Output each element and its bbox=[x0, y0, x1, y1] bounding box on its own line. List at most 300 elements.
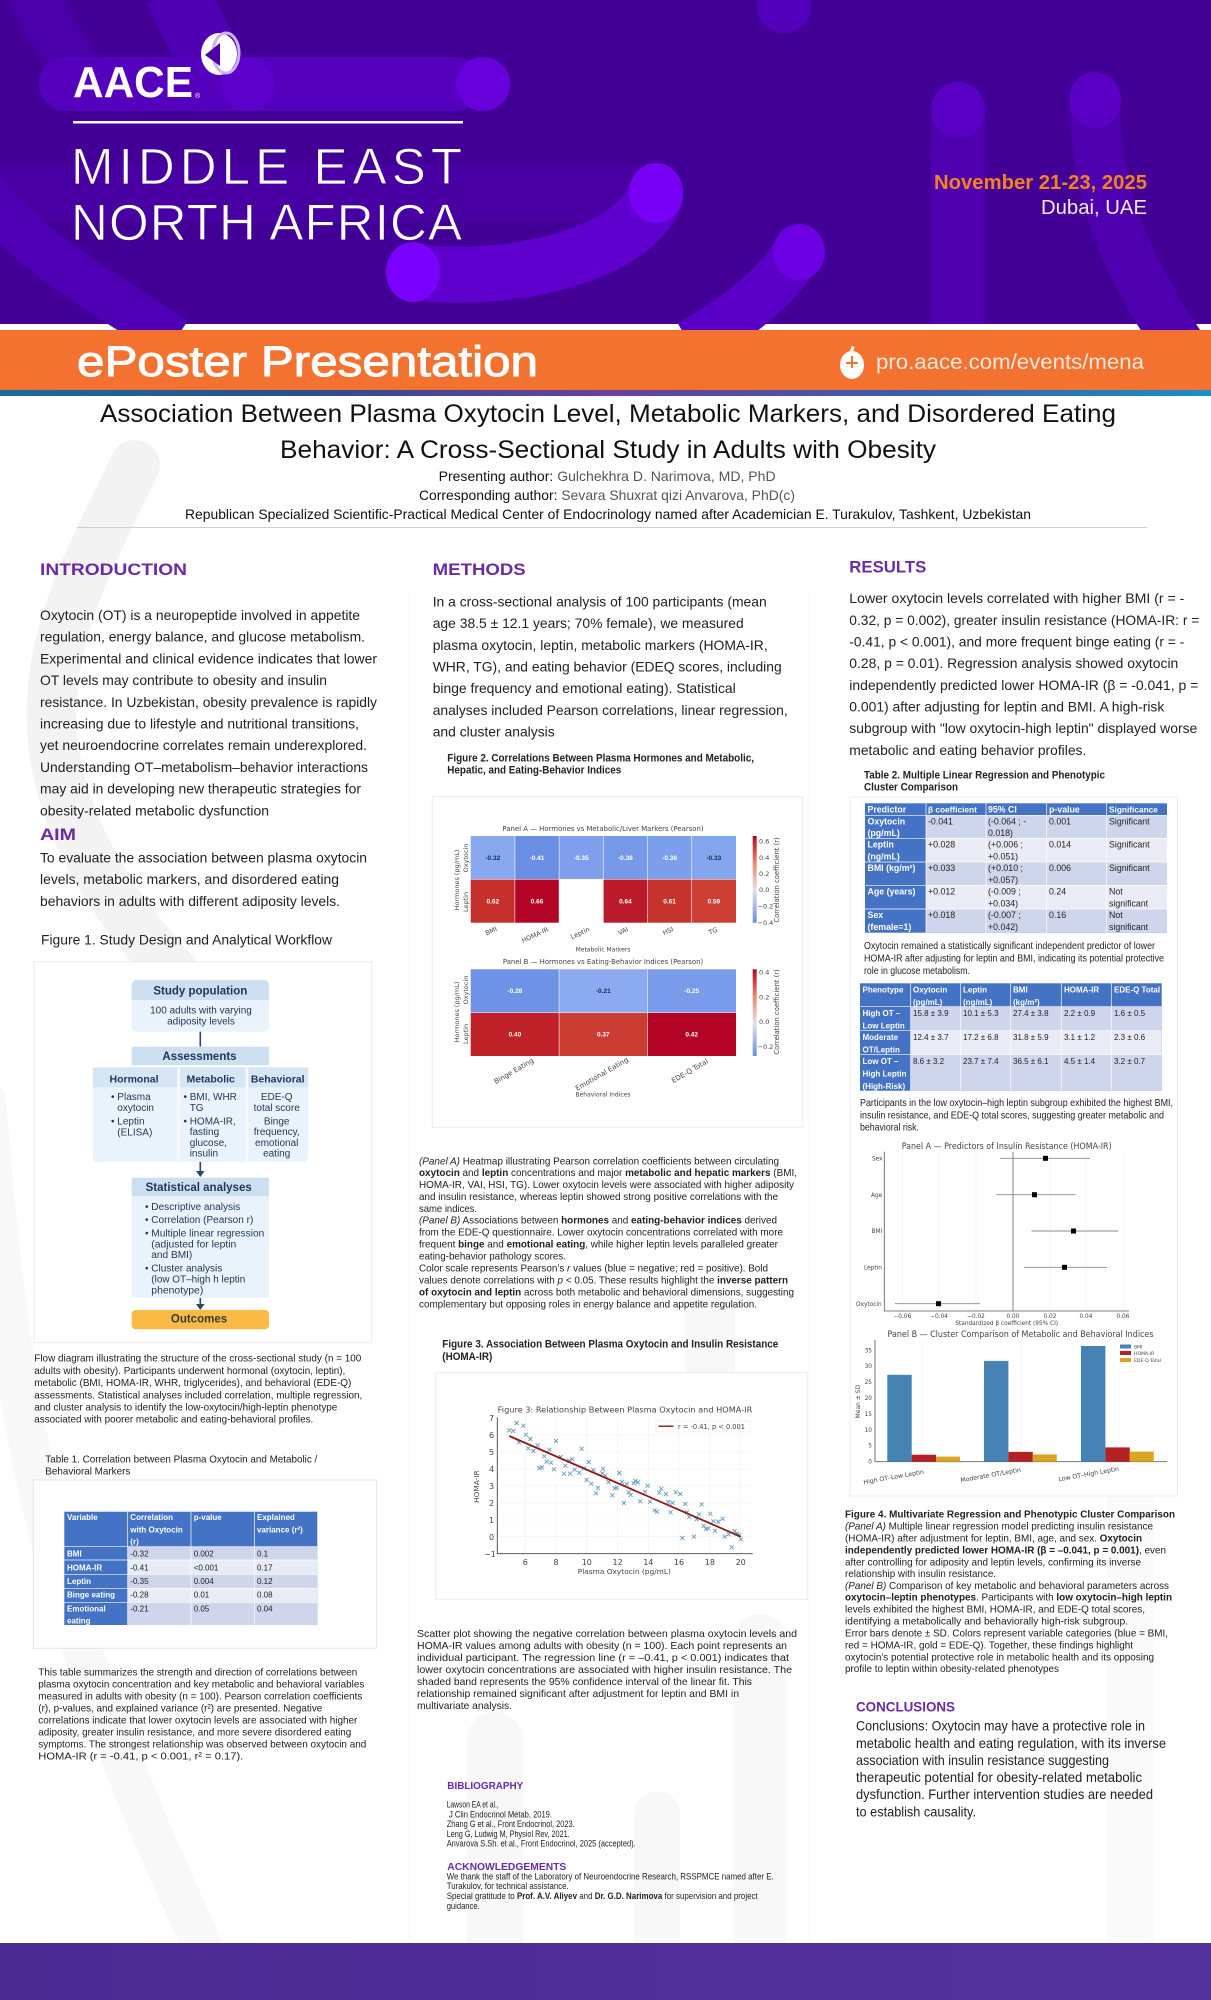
box: assessments: • bbox=[184, 1116, 188, 1127]
table 1 caption: symptoms. The strongest relationship was observed between oxytocin and bbox=[38, 1739, 367, 1750]
figure 3 heading: (HOMA-IR) bbox=[442, 1351, 493, 1363]
tick labels: 6 bbox=[489, 1431, 494, 1440]
box: assessments: Plasma bbox=[117, 1092, 151, 1103]
table: regression: -0.041 bbox=[928, 816, 953, 826]
heatmap: panel A bbox=[453, 825, 781, 954]
box: assessments: BMI, WHR bbox=[190, 1092, 237, 1103]
panel: figure 1 flow diagram bbox=[34, 962, 372, 1343]
heatmap: panel A: TG bbox=[706, 926, 719, 937]
tick labels: −1 bbox=[484, 1550, 496, 1559]
panel: figure 3 scatter plot: HOMA-IR bbox=[472, 1470, 481, 1503]
figure 3 caption: relationship remained significant after adjustment for leptin and BMI in bbox=[417, 1689, 739, 1700]
legend: EDE-Q Total bbox=[1134, 1358, 1161, 1364]
heatmap: panel A: Metabolic Markers bbox=[576, 946, 630, 954]
text: aim bbox=[40, 850, 367, 909]
legend bbox=[1118, 1343, 1165, 1367]
table: correlations: 0.05 bbox=[194, 1604, 210, 1613]
table: phenotypes bbox=[860, 983, 1162, 1091]
table: correlations: (r) bbox=[130, 1537, 139, 1546]
ePoster band: pro.aace.com/events/mena bbox=[876, 351, 1144, 374]
chart: bar chart panel B: 15 bbox=[865, 1412, 872, 1418]
heatmap: panel A: -0.38 bbox=[618, 855, 633, 862]
chart: bar chart panel B: 25 bbox=[865, 1380, 872, 1386]
authors and affiliation: Republican Specialized Scientific-Practical Medical Center of Endocrinology named after Academician E. Turakulov, Tashkent, Uzbekistan bbox=[185, 506, 1031, 522]
text: results: independently predicted lower HOMA-IR (β = -0.041, p = bbox=[849, 677, 1198, 693]
heatmap: panel B: Oxytocin bbox=[462, 976, 470, 1004]
panel: table 2 and figure 4 bbox=[850, 797, 1178, 1496]
text: introduction: regulation, energy balance, and glucose metabolism. bbox=[40, 629, 365, 645]
box: assessments: HOMA-IR, bbox=[190, 1116, 236, 1127]
box: assessments: Binge bbox=[264, 1116, 290, 1127]
date and place: November 21-23, 2025 bbox=[934, 172, 1147, 194]
figure 2 caption: and insulin resistance, whereas leptin showed strong positive correlations with the bbox=[419, 1192, 778, 1203]
colour scale B: 0.0 bbox=[759, 1018, 769, 1026]
heatmap: panel B: Emotional Eating bbox=[574, 1056, 630, 1093]
table: correlations: 0.002 bbox=[194, 1550, 214, 1559]
table: regression: 0.24 bbox=[1049, 886, 1066, 896]
box: assessments bbox=[93, 1047, 308, 1162]
heatmap: panel A: -0.36 bbox=[662, 855, 677, 862]
tick labels: 4 bbox=[489, 1465, 494, 1474]
box: assessments: Hormonal bbox=[109, 1073, 159, 1085]
table: correlations: Variable bbox=[67, 1513, 98, 1522]
table: correlations: with Oxytocin bbox=[129, 1525, 183, 1534]
box: statistical analyses: (low OT–high h leptin bbox=[151, 1274, 245, 1285]
phenotype note: Participants in the low oxytocin–high leptin subgroup exhibited the highest BMI, bbox=[860, 1098, 1173, 1109]
text: acknowledgements: Turakulov, for technical assistance. bbox=[447, 1881, 569, 1891]
title bbox=[100, 400, 1116, 464]
table 2 note: role in glucose metabolism. bbox=[864, 966, 970, 977]
table: phenotypes: Phenotype bbox=[862, 986, 904, 995]
heatmap: panel A: -0.35 bbox=[574, 855, 589, 862]
text: results: Lower oxytocin levels correlated with higher BMI (r = - bbox=[849, 590, 1185, 606]
text: acknowledgements bbox=[447, 1871, 774, 1911]
table: regression: +0.028 bbox=[928, 840, 955, 850]
table: phenotypes: HOMA-IR bbox=[1064, 986, 1099, 995]
box: assessments: • bbox=[111, 1092, 115, 1103]
text: acknowledgements: We thank the staff of the Laboratory of Neuroendocrine Research, RSSPMCE named after E. bbox=[447, 1871, 774, 1881]
text: bibliography bbox=[447, 1800, 636, 1849]
footer band bbox=[0, 1943, 1211, 2000]
text: conclusions: metabolic health and eating regulation, with its inverse bbox=[856, 1735, 1166, 1751]
text: acknowledgements: guidance. bbox=[447, 1901, 480, 1911]
chart: forest plot panel A: Panel A — Predictors of Insulin Resistance (HOMA-IR) bbox=[902, 1141, 1112, 1151]
heading: introduction: INTRODUCTION bbox=[40, 560, 187, 579]
colour scale B: 0.4 bbox=[759, 968, 769, 976]
table: phenotypes: 2.2 ± 0.9 bbox=[1064, 1009, 1096, 1018]
table: correlations: 0.04 bbox=[257, 1604, 273, 1613]
colour scale B: 0.2 bbox=[759, 994, 769, 1002]
table: regression: +0.051) bbox=[988, 852, 1018, 862]
tick labels: 14 bbox=[643, 1558, 653, 1567]
table: phenotypes: High OT – bbox=[862, 1009, 901, 1018]
table: regression: Not bbox=[1109, 910, 1123, 920]
tick labels: 2 bbox=[489, 1499, 494, 1508]
text: methods: age 38.5 ± 12.1 years; 70% female), we measured bbox=[433, 615, 744, 631]
figure 2 heading bbox=[447, 753, 754, 776]
table 2 heading: Table 2. Multiple Linear Regression and Phenotypic bbox=[864, 769, 1105, 781]
figure 2 caption bbox=[419, 1156, 797, 1310]
figure 2 caption: of oxytocin and leptin across both metabolic and behavioral dimensions, suggesting bbox=[419, 1287, 794, 1298]
text: acknowledgements: Special gratitude to Prof. A.V. Aliyev and Dr. G.D. Narimova for supervision and project bbox=[447, 1891, 758, 1901]
heading: bibliography: BIBLIOGRAPHY bbox=[447, 1780, 523, 1792]
table 1 heading bbox=[45, 1455, 317, 1478]
figure 2 caption: HOMA-IR, VAI, HSI, TG). Lower oxytocin levels were associated with higher adiposity bbox=[419, 1180, 795, 1191]
heading: aim: AIM bbox=[40, 825, 76, 844]
table: phenotypes: (pg/mL) bbox=[913, 998, 943, 1007]
figure 1 caption: and cluster analysis to identify the low-oxytocin/high-leptin phenotype bbox=[34, 1403, 338, 1414]
chart: forest plot panel A: −0.06 bbox=[893, 1314, 911, 1320]
figure 4 caption: (HOMA-IR) after adjustment for leptin, BMI, age, and sex. Oxytocin bbox=[845, 1533, 1142, 1544]
table: regression: Significant bbox=[1109, 816, 1150, 826]
box: assessments: Assessments bbox=[162, 1051, 237, 1063]
chart: bar chart panel B: 10 bbox=[865, 1428, 872, 1434]
tick labels bbox=[484, 1414, 746, 1567]
text: introduction: resistance. In Uzbekistan, obesity prevalence is rapidly bbox=[40, 694, 377, 710]
figure 2 caption: values denote correlations with p < 0.05. These results highlight the inverse pattern bbox=[419, 1276, 788, 1287]
tick labels: 10 bbox=[582, 1558, 592, 1567]
tick labels: 18 bbox=[705, 1558, 715, 1567]
heading: methods: METHODS bbox=[433, 560, 526, 579]
chart: forest plot panel A: 0.00 bbox=[1007, 1314, 1020, 1320]
table: regression: significant bbox=[1109, 922, 1149, 932]
text: introduction: yet neuroendocrine correlates remain underexplored. bbox=[40, 737, 367, 753]
figure 2 caption: complementary but opposing roles in energy balance and appetite regulation. bbox=[419, 1299, 757, 1310]
conference name bbox=[71, 138, 462, 251]
text: methods bbox=[433, 594, 788, 740]
table: correlations: Explained bbox=[257, 1513, 295, 1522]
chart: forest plot panel A: 0.02 bbox=[1044, 1314, 1057, 1320]
table: regression: (-0.064 ; - bbox=[988, 816, 1026, 826]
table: regression: 0.006 bbox=[1049, 863, 1071, 873]
figure 2 caption: eating-behavior pathology scores. bbox=[419, 1252, 566, 1263]
tick labels: 20 bbox=[736, 1558, 746, 1567]
box: assessments: Leptin bbox=[117, 1116, 145, 1127]
table: phenotypes: (kg/m²) bbox=[1013, 998, 1040, 1007]
phenotype note bbox=[860, 1098, 1173, 1134]
table: regression: Significant bbox=[1109, 863, 1150, 873]
text: methods: plasma oxytocin, leptin, metabolic markers (HOMA-IR, bbox=[433, 637, 768, 653]
box: outcomes: Outcomes bbox=[171, 1314, 227, 1326]
text: conclusions: Conclusions: Oxytocin may have a protective role in bbox=[856, 1718, 1145, 1734]
chart: forest plot panel A: 0.06 bbox=[1117, 1314, 1130, 1320]
table: regression: p-value bbox=[1049, 805, 1080, 815]
figure 3 caption: individual participant. The regression line (r = –0.41, p < 0.001) indicates that bbox=[417, 1653, 789, 1664]
box: assessments: EDE-Q bbox=[261, 1092, 293, 1103]
table: correlations: -0.32 bbox=[130, 1550, 149, 1559]
table: regression: Age (years) bbox=[868, 886, 915, 896]
table: phenotypes: 3.1 ± 1.2 bbox=[1064, 1033, 1096, 1042]
figure 2 caption: (Panel B) Associations between hormones and eating-behavior indices derived bbox=[419, 1216, 777, 1227]
legend bbox=[656, 1421, 750, 1432]
figure 1 heading: Figure 1. Study Design and Analytical Workflow bbox=[41, 933, 332, 948]
table 2 note: HOMA-IR after adjusting for leptin and BMI, indicating its potential protective bbox=[864, 954, 1164, 965]
figure 4 caption: levels exhibited the highest BMI, HOMA-IR, and EDE-Q total scores, bbox=[845, 1605, 1145, 1616]
heatmap: panel A: BMI bbox=[484, 925, 498, 937]
figure 4 caption: after controlling for adiposity and leptin levels, confirming its inverse bbox=[845, 1557, 1141, 1568]
box: assessments: Behavioral bbox=[251, 1073, 305, 1085]
chart: forest plot panel A: Standardized β coefficient (95% CI) bbox=[955, 1321, 1058, 1327]
colour scale B: Correlation coefficient (r) bbox=[773, 969, 781, 1055]
text: introduction: OT levels may contribute to obesity and insulin bbox=[40, 672, 327, 688]
text: introduction: Understanding OT–metabolism–behavior interactions bbox=[40, 759, 368, 775]
figure 2 caption: same indices. bbox=[419, 1204, 477, 1215]
authors and affiliation: Presenting author: Gulchekhra D. Narimova, MD, PhD bbox=[439, 468, 776, 484]
table: phenotypes: Leptin bbox=[963, 986, 987, 995]
box: assessments: (ELISA) bbox=[117, 1127, 152, 1138]
table: correlations: p-value bbox=[194, 1513, 222, 1522]
panel: figure 3 scatter plot bbox=[436, 1373, 807, 1599]
figure 4 caption bbox=[845, 1509, 1175, 1675]
phenotype note: behavioral risk. bbox=[860, 1123, 919, 1134]
AACE logo: AACE bbox=[73, 58, 193, 107]
box: statistical analyses: phenotype) bbox=[151, 1285, 203, 1296]
table: regression: significant bbox=[1109, 898, 1149, 908]
table: regression: 0.16 bbox=[1049, 910, 1066, 920]
table: phenotypes: 36.5 ± 6.1 bbox=[1013, 1057, 1049, 1066]
chart: bar chart panel B: Mean ± SD bbox=[855, 1385, 862, 1419]
table: phenotypes: 27.4 ± 3.8 bbox=[1013, 1009, 1049, 1018]
heatmap: panel A: 0.62 bbox=[486, 898, 500, 905]
figure 3 caption: multivariate analysis. bbox=[417, 1701, 512, 1712]
figure 2 caption: from the EDE-Q questionnaire. Lower oxytocin concentrations correlated with more bbox=[419, 1228, 783, 1239]
box: assessments: TG bbox=[190, 1103, 204, 1114]
heatmap: panel B: -0.28 bbox=[507, 988, 523, 995]
regression line bbox=[509, 1436, 741, 1537]
table: correlations: 0.01 bbox=[194, 1591, 210, 1600]
text: introduction: obesity-related metabolic dysfunction bbox=[40, 802, 269, 818]
heatmap: panel A: 0.61 bbox=[663, 898, 676, 905]
tick labels: 8 bbox=[553, 1558, 559, 1567]
tick labels: 5 bbox=[489, 1448, 494, 1457]
text: introduction: increasing due to lifestyle and nutritional transitions, bbox=[40, 716, 359, 732]
box: assessments: frequency, bbox=[254, 1127, 300, 1138]
table: regression: +0.042) bbox=[988, 922, 1018, 932]
heatmap: panel A: 0.64 bbox=[619, 898, 632, 905]
chart: forest plot panel A: 0.04 bbox=[1080, 1314, 1093, 1320]
date and place: Dubai, UAE bbox=[1041, 197, 1147, 219]
legend: HOMA-IR bbox=[1134, 1351, 1155, 1357]
table: correlations: -0.21 bbox=[130, 1604, 149, 1613]
figure 3 caption: HOMA-IR values among adults with obesity (n = 100). Each point represents an bbox=[417, 1641, 787, 1652]
figure 4 caption: profile to leptin within obesity-related phenotypes bbox=[845, 1664, 1059, 1675]
table: phenotypes: 3.2 ± 0.7 bbox=[1114, 1057, 1146, 1066]
table: correlations: Binge eating bbox=[67, 1591, 115, 1600]
table: regression: +0.057) bbox=[988, 875, 1018, 885]
table: regression: (ng/mL) bbox=[868, 852, 900, 862]
box: study population: 100 adults with varying bbox=[150, 1005, 252, 1016]
box: statistical analyses: • bbox=[145, 1228, 149, 1239]
heatmap: panel A: -0.33 bbox=[706, 855, 722, 862]
background watermark shapes bbox=[0, 465, 1130, 1960]
text: methods: binge frequency and emotional eating). Statistical bbox=[433, 680, 736, 696]
AACE logo bbox=[73, 33, 239, 107]
grid and axes bbox=[497, 1417, 753, 1554]
tick labels: 1 bbox=[489, 1516, 494, 1525]
table: correlations: 0.17 bbox=[257, 1563, 273, 1572]
table: phenotypes: EDE-Q Total bbox=[1114, 986, 1160, 995]
text: methods: analyses included Pearson correlations, linear regression, bbox=[433, 702, 788, 718]
table: phenotypes: OT/Leptin bbox=[862, 1046, 900, 1055]
title: Association Between Plasma Oxytocin Level, Metabolic Markers, and Disordered Eating bbox=[100, 400, 1116, 428]
table: phenotypes: 23.7 ± 7.4 bbox=[963, 1057, 999, 1066]
title: Behavior: A Cross-Sectional Study in Adults with Obesity bbox=[280, 436, 937, 464]
chart: forest plot panel A: Oxytocin bbox=[856, 1302, 882, 1308]
table: phenotypes: Low OT – bbox=[862, 1057, 899, 1066]
colour scale A: 0.6 bbox=[759, 838, 769, 846]
box: assessments: total score bbox=[254, 1103, 300, 1114]
figure 3 caption: lower oxytocin concentrations are associated with higher insulin resistance. The bbox=[417, 1665, 792, 1676]
tick labels: 0 bbox=[489, 1533, 494, 1542]
table: regression: 0.014 bbox=[1049, 840, 1071, 850]
heatmap: panel B: Binge Eating bbox=[493, 1057, 535, 1086]
table: correlations: Correlation bbox=[130, 1513, 173, 1522]
text: introduction: Oxytocin (OT) is a neuropeptide involved in appetite bbox=[40, 607, 360, 623]
table 2 heading bbox=[864, 769, 1105, 794]
table 1 caption: plasma oxytocin concentration and key metabolic and behavioral variables bbox=[38, 1680, 364, 1691]
text: results: 0.32, p = 0.002), greater insulin resistance (HOMA-IR: r = bbox=[849, 612, 1199, 628]
box: statistical analyses: Correlation (Pearson r) bbox=[151, 1215, 253, 1226]
table: correlations: -0.28 bbox=[130, 1591, 149, 1600]
table: phenotypes: High Leptin bbox=[862, 1070, 907, 1079]
table: correlations: eating bbox=[67, 1616, 91, 1625]
chart: forest plot panel A: BMI bbox=[872, 1229, 882, 1235]
heatmap: panel B: -0.21 bbox=[596, 988, 611, 995]
table: phenotypes: 31.8 ± 5.9 bbox=[1013, 1033, 1049, 1042]
figure 1 caption: metabolic (BMI, HOMA-IR, WHR, triglycerides), and behavioral (EDE-Q) bbox=[34, 1378, 351, 1389]
chart: bar chart panel B: 5 bbox=[868, 1444, 872, 1450]
table: regression: +0.034) bbox=[988, 898, 1018, 908]
heading: acknowledgements: ACKNOWLEDGEMENTS bbox=[447, 1861, 566, 1873]
table: correlations: 0.1 bbox=[257, 1550, 269, 1559]
colour scale A: 0.2 bbox=[759, 870, 769, 878]
table 1 caption: correlations indicate that lower oxytocin levels are associated with higher bbox=[38, 1715, 358, 1726]
figure 2 caption: frequent binge and emotional eating, while higher leptin levels paralleled greater bbox=[419, 1240, 779, 1251]
heatmap: panel B: 0.40 bbox=[509, 1031, 522, 1038]
box: study population: adiposity levels bbox=[167, 1017, 235, 1028]
table: correlations: -0.35 bbox=[130, 1577, 149, 1586]
heatmap: panel B: Hormones (pg/mL) bbox=[453, 982, 461, 1042]
tick labels: 3 bbox=[489, 1482, 494, 1491]
panel: figure 2 heatmaps bbox=[432, 797, 803, 1127]
figure 2 caption: oxytocin and leptin concentrations and major metabolic and hepatic markers (BMI, bbox=[419, 1168, 797, 1179]
box: assessments: insulin bbox=[190, 1149, 218, 1160]
heatmap: panel A: -0.32 bbox=[485, 855, 501, 862]
colour scale B bbox=[753, 968, 781, 1056]
box: statistical analyses: Multiple linear regression bbox=[151, 1228, 264, 1239]
table: correlations: HOMA-IR bbox=[67, 1563, 102, 1572]
arrow bbox=[196, 1298, 205, 1310]
table 2 heading: Cluster Comparison bbox=[864, 782, 958, 794]
text: methods: WHR, TG), and eating behavior (EDEQ scores, including bbox=[433, 659, 782, 675]
table 1 caption: adiposity, greater insulin resistance, and more severe disordered eating bbox=[38, 1727, 352, 1738]
box: statistical analyses: (adjusted for leptin bbox=[151, 1239, 236, 1250]
figure 4 caption: relationship with insulin resistance. bbox=[845, 1569, 996, 1580]
figure 1 caption bbox=[34, 1354, 362, 1426]
chart: bar chart panel B: Moderate OT/Leptin bbox=[960, 1467, 1022, 1484]
chart: forest plot panel A: Leptin bbox=[864, 1266, 882, 1272]
colour scale A: 0.0 bbox=[759, 886, 769, 894]
table: phenotypes: 10.1 ± 5.3 bbox=[963, 1009, 999, 1018]
figure 2 caption: (Panel A) Heatmap illustrating Pearson correlation coefficients between circulating bbox=[419, 1156, 779, 1167]
chart: bar chart panel B: High OT–Low Leptin bbox=[863, 1469, 925, 1486]
figure 3 caption: Scatter plot showing the negative correlation between plasma oxytocin levels and bbox=[417, 1629, 797, 1640]
chart: bar chart panel B: 0 bbox=[868, 1460, 872, 1466]
table 1 caption bbox=[38, 1668, 367, 1762]
heatmap: panel A: VAI bbox=[617, 925, 630, 937]
table: regression: (-0.009 ; bbox=[988, 886, 1021, 896]
table 2 note: Oxytocin remained a statistically significant independent predictor of lower bbox=[864, 941, 1156, 952]
box: statistical analyses: Descriptive analysis bbox=[151, 1202, 240, 1213]
text: results: -0.41, p < 0.001), and more frequent binge eating (r = - bbox=[849, 634, 1185, 650]
heatmap: panel B bbox=[453, 958, 781, 1098]
text: conclusions: to establish causality. bbox=[856, 1804, 976, 1820]
text: introduction bbox=[40, 607, 377, 818]
colour scale A: −0.2 bbox=[758, 902, 773, 910]
scatter points bbox=[507, 1421, 743, 1549]
table: phenotypes: 12.4 ± 3.7 bbox=[913, 1033, 949, 1042]
colour scale A: 0.4 bbox=[759, 854, 769, 862]
text: conclusions: therapeutic potential for obesity-related metabolic bbox=[856, 1769, 1142, 1785]
panel: figure 3 scatter plot: Plasma Oxytocin (pg/mL) bbox=[578, 1567, 671, 1576]
box: statistical analyses: • bbox=[145, 1263, 149, 1274]
box: statistical analyses: • bbox=[145, 1215, 149, 1226]
table: regression: Oxytocin bbox=[868, 816, 905, 826]
chart: bar chart panel B: Panel B — Cluster Comparison of Metabolic and Behavioral Indices bbox=[888, 1329, 1154, 1339]
tick labels: 16 bbox=[674, 1558, 684, 1567]
table: regression: (+0.010 ; bbox=[988, 863, 1023, 873]
box: assessments: oxytocin bbox=[117, 1103, 154, 1114]
table 2 note bbox=[864, 941, 1164, 977]
text: aim: To evaluate the association between plasma oxytocin bbox=[40, 850, 367, 866]
box: statistical analyses: • bbox=[145, 1202, 149, 1213]
chart: forest plot panel A: −0.02 bbox=[967, 1314, 985, 1320]
box: assessments: • bbox=[111, 1116, 115, 1127]
conference name: NORTH AFRICA bbox=[71, 194, 462, 251]
heatmap: panel A: Leptin bbox=[569, 925, 591, 941]
legend: BMI bbox=[1134, 1344, 1142, 1350]
figure 4 caption: oxytocin–leptin phenotypes. Participants with low oxytocin–high leptin bbox=[845, 1593, 1172, 1604]
table: regression bbox=[865, 803, 1167, 933]
colour scale A: −0.4 bbox=[758, 919, 773, 927]
table: regression: Not bbox=[1109, 886, 1123, 896]
table: correlations: 0.12 bbox=[257, 1577, 273, 1586]
box: assessments: • bbox=[184, 1092, 188, 1103]
figure 1 caption: adults with obesity). Participants underwent hormonal (oxytocin, leptin), bbox=[34, 1366, 345, 1377]
table 1 heading: Behavioral Markers bbox=[45, 1467, 130, 1478]
figure 1 caption: Flow diagram illustrating the structure of the cross-sectional study (n = 100 bbox=[34, 1354, 362, 1365]
figure 3 heading bbox=[442, 1339, 778, 1363]
figure 4 caption: (Panel A) Multiple linear regression model predicting insulin resistance bbox=[845, 1521, 1153, 1532]
table 1 caption: (r), p-values, and explained variance (r²) are presented. Negative bbox=[38, 1704, 323, 1715]
text: introduction: Experimental and clinical evidence indicates that lower bbox=[40, 650, 377, 666]
table: correlations: <0.001 bbox=[194, 1563, 219, 1572]
table: regression: Significance bbox=[1109, 805, 1158, 815]
heatmap: panel A: Panel A — Hormones vs Metabolic/Liver Markers (Pearson) bbox=[502, 825, 704, 833]
colour scale A: Correlation coefficient (r) bbox=[773, 837, 781, 923]
chart: forest plot panel A: Age bbox=[871, 1193, 883, 1199]
figure 4 caption: Figure 4. Multivariate Regression and Phenotypic Cluster Comparison bbox=[845, 1509, 1175, 1520]
table: phenotypes: (ng/mL) bbox=[963, 998, 993, 1007]
box: assessments: Metabolic bbox=[186, 1073, 235, 1085]
conference name: MIDDLE EAST bbox=[71, 138, 462, 195]
box: study population bbox=[132, 980, 269, 1032]
text: conclusions: dysfunction. Further intervention studies are needed bbox=[856, 1786, 1153, 1802]
tick labels: 7 bbox=[489, 1414, 494, 1423]
text: conclusions bbox=[856, 1718, 1166, 1820]
figure 1 caption: assessments. Statistical analyses included correlation, multiple regression, bbox=[34, 1390, 362, 1401]
phenotype note: insulin resistance, and EDE-Q total scores, suggesting greater metabolic and bbox=[860, 1110, 1164, 1121]
